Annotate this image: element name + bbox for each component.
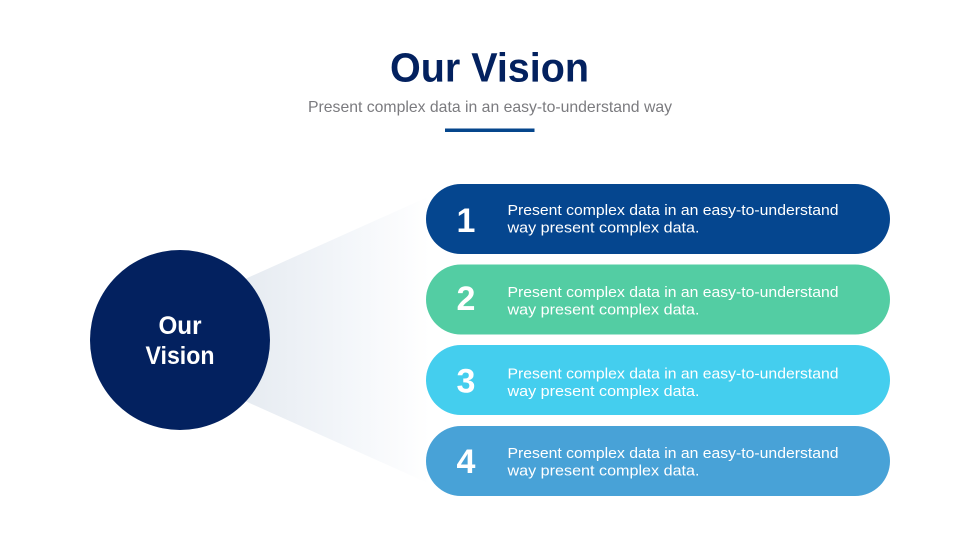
number 4: 4: [457, 443, 476, 481]
item 1: [426, 184, 890, 254]
item 4: [426, 426, 890, 496]
item 2: [426, 264, 890, 334]
central circle: [90, 250, 270, 430]
item 1 text: way present complex data.: [506, 220, 700, 236]
title: Our Vision: [390, 44, 589, 90]
item 3 text: Present complex data in an easy-to-understand: [508, 366, 838, 382]
number 2: 2: [457, 280, 475, 318]
circle label: Vision: [146, 342, 214, 370]
number 1: 1: [457, 202, 475, 240]
title underline: [445, 128, 534, 132]
item 3: [426, 345, 890, 415]
item 3 text: way present complex data.: [506, 383, 700, 400]
circle label: Our: [158, 312, 202, 340]
item 4 text: Present complex data in an easy-to-understand: [508, 445, 838, 462]
item 2 text: Present complex data in an easy-to-understand: [508, 284, 838, 301]
subtitle: Present complex data in an easy-to-understand way: [308, 99, 672, 116]
item 1 text: Present complex data in an easy-to-understand: [508, 202, 838, 219]
item 4 text: way present complex data.: [506, 462, 700, 480]
item 2 text: way present complex data.: [506, 302, 700, 318]
light beam from circle to pills: [245, 196, 430, 484]
number 3: 3: [457, 362, 475, 400]
